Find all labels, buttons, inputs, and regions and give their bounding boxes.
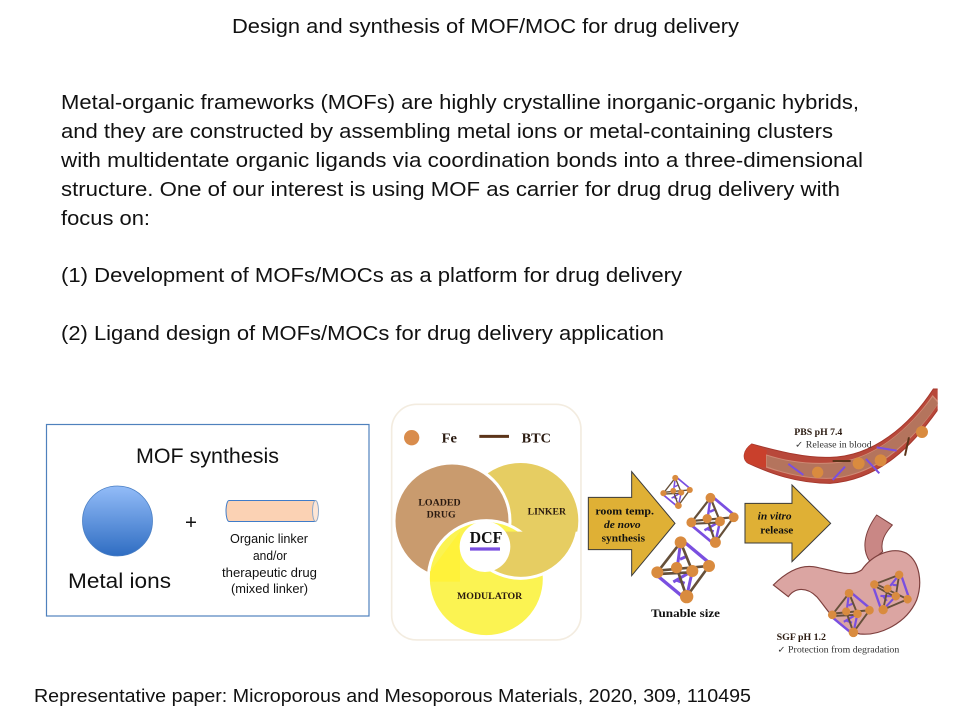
label: PBS pH 7.4 <box>794 427 872 449</box>
legend: Fe: Fe <box>442 431 457 446</box>
legend: BTC: BTC <box>522 431 551 446</box>
arrow: de novo synthesis: room temp. <box>595 506 654 517</box>
label: SGF pH 1.2: SGF pH 1.2 <box>777 632 827 642</box>
label: organic linker: (mixed linker) <box>231 582 308 596</box>
arrow: de novo synthesis: de novo <box>604 520 641 531</box>
arrow: in vitro release: release <box>760 525 794 536</box>
legend: Fe <box>404 430 457 446</box>
arrow: de novo synthesis: synthesis <box>602 534 645 545</box>
small MOF particle <box>660 475 693 509</box>
focus item 1: (1) Development of MOFs/MOCs as a platform for drug delivery <box>61 264 683 287</box>
label: DCF: DCF <box>470 528 502 547</box>
label: tunable size: Tunable size <box>651 606 721 620</box>
focus item 2: (2) Ligand design of MOFs/MOCs for drug delivery application <box>61 322 664 345</box>
panel: synthesis arrows and particles <box>588 472 831 620</box>
label: SGF pH 1.2: ✓ Protection from degradation <box>777 644 900 654</box>
legend: BTC <box>479 431 551 446</box>
intro paragraph: and they are constructed by assembling metal ions or metal-containing clusters <box>61 120 833 143</box>
MOF particle in stomach, upper <box>860 561 922 624</box>
esophagus <box>865 515 892 562</box>
intro paragraph: with multidentate organic ligands via coordination bonds into a three-dimensional <box>60 149 863 172</box>
label: linker: LINKER <box>528 507 567 518</box>
label: PBS pH 7.4: ✓ Release in blood <box>795 439 872 449</box>
label: loaded drug: DRUG <box>427 510 456 521</box>
label: organic linker <box>222 532 317 596</box>
medium MOF particle <box>686 493 739 548</box>
label: SGF pH 1.2 <box>777 632 900 654</box>
arrow: in vitro release <box>745 485 831 562</box>
label: organic linker: Organic linker <box>230 532 308 546</box>
plus sign: + <box>185 512 197 534</box>
label: organic linker: and/or <box>253 549 287 563</box>
panel: MOF synthesis <box>46 424 369 616</box>
icon: metal ion sphere <box>82 486 152 556</box>
intro paragraph: focus on: <box>61 207 150 230</box>
arrow: de novo synthesis <box>588 472 675 576</box>
label: organic linker: therapeutic drug <box>222 566 317 580</box>
label: loaded drug: LOADED <box>418 498 461 509</box>
arrow: in vitro release: in vitro <box>758 511 792 522</box>
label: PBS pH 7.4: PBS pH 7.4 <box>794 427 843 437</box>
label: metal ions: Metal ions <box>68 570 171 593</box>
intro paragraph: Metal-organic frameworks (MOFs) are highly crystalline inorganic-organic hybrids, <box>61 91 859 114</box>
icon: organic linker cylinder <box>226 500 318 522</box>
intro paragraph <box>60 91 863 230</box>
title: Design and synthesis of MOF/MOC for drug delivery <box>232 15 740 38</box>
venn circles <box>394 463 578 637</box>
stomach <box>773 551 920 634</box>
heading: MOF synthesis: MOF synthesis <box>136 445 279 468</box>
blood vessel <box>744 389 940 483</box>
panel: blood vessel release <box>744 389 940 483</box>
label: modulator: MODULATOR <box>457 591 523 602</box>
large MOF particle <box>651 536 715 603</box>
MOF particle in stomach, lower <box>828 589 874 637</box>
label: loaded drug <box>418 498 461 521</box>
panel: stomach protection <box>773 515 922 654</box>
intro paragraph: structure. One of our interest is using MOF as carrier for drug drug delivery with <box>61 178 840 201</box>
citation: Representative paper: Microporous and Mesoporous Materials, 2020, 309, 110495 <box>34 685 751 706</box>
panel: DCF venn diagram <box>392 404 581 640</box>
